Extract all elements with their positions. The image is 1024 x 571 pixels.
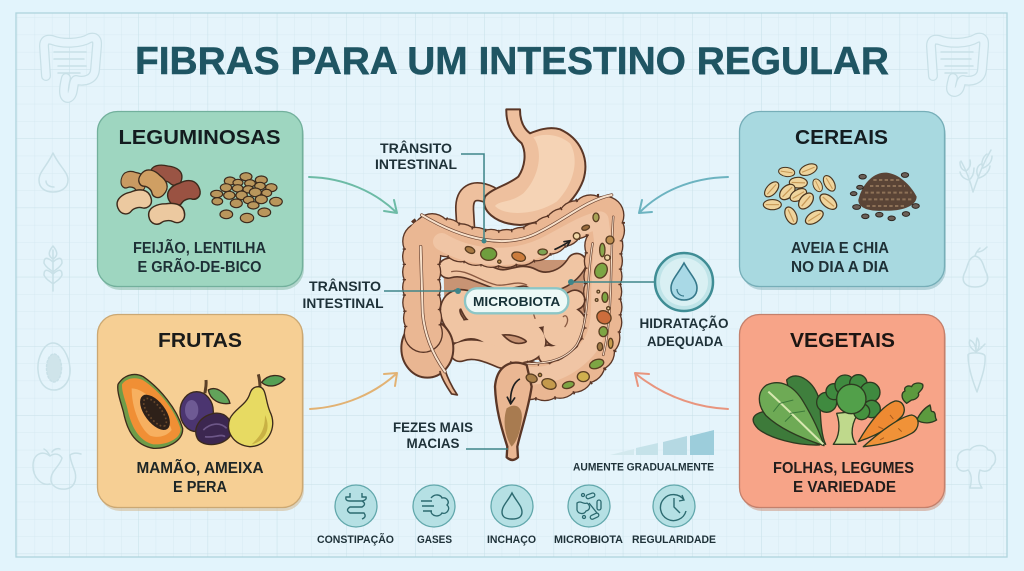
text: leguminosas description: FEIJÃO, LENTILHA [133, 239, 266, 257]
icon: inchaco [491, 485, 533, 527]
icon: faint wheat right [960, 150, 992, 192]
icon: regularidade [653, 485, 695, 527]
heading: leguminosas: LEGUMINOSAS [118, 127, 280, 149]
pill: microbiota: MICROBIOTA [473, 295, 560, 309]
pill: microbiota [465, 288, 568, 313]
panel: vegetais [740, 314, 946, 511]
label: fezes mais macias: MACIAS [406, 435, 460, 451]
arrow: vegetais to intestine [635, 373, 728, 409]
text: vegetais description: E VARIEDADE [793, 479, 896, 496]
text: frutas description: E PERA [173, 479, 227, 496]
text: leguminosas description: E GRÃO-DE-BICO [138, 258, 262, 276]
flow arrows [507, 241, 570, 404]
label: microbiota: MICROBIOTA [554, 534, 623, 546]
heading: frutas: FRUTAS [158, 330, 242, 352]
icon: faint papaya left [38, 343, 70, 390]
icon: faint papaya seeds [46, 354, 62, 382]
arrow: frutas to intestine [310, 373, 397, 409]
icon: leafy greens, broccoli and carrots [753, 375, 937, 447]
label: gases: GASES [417, 534, 452, 546]
colon [401, 195, 613, 395]
label: fezes mais macias: FEZES MAIS [393, 419, 473, 435]
icon: hydration circle [655, 253, 713, 311]
stomach [484, 109, 585, 225]
arrow: cereais to intestine [639, 177, 728, 213]
icon: faint broccoli right [957, 446, 995, 488]
duodenum [465, 192, 490, 233]
icon: faint intestine left [44, 38, 97, 98]
title: FIBRAS PARA UM INTESTINO REGULAR [135, 40, 889, 83]
panel: leguminosas [98, 112, 304, 290]
panel: frutas [98, 314, 304, 511]
label: transito intestinal left: INTESTINAL [302, 295, 384, 311]
panel: cereais [740, 112, 946, 290]
text: frutas description [136, 459, 264, 496]
icon: faint intestine right [931, 38, 984, 92]
label: aumente gradualmente: AUMENTE GRADUALMENTE [573, 462, 714, 474]
icon: faint apple and pear [33, 449, 81, 489]
label: hidratacao adequada [640, 314, 729, 349]
heading: cereais: CEREAIS [795, 127, 888, 149]
colon contents [464, 213, 614, 391]
text: frutas description: MAMÃO, AMEIXA [136, 459, 264, 477]
icon: microbiota [568, 485, 610, 527]
text: cereais description: NO DIA A DIA [791, 259, 889, 276]
icon: oats and chia [762, 162, 919, 227]
label: constipacao: CONSTIPAÇÃO [317, 533, 394, 546]
icon: papaya, plums and pear [118, 374, 285, 448]
icon: constipacao [335, 485, 377, 527]
icon: gases [413, 485, 455, 527]
leader lines [384, 154, 656, 449]
icon: beans and lentils [114, 163, 282, 225]
label: transito intestinal left: TRÂNSITO [309, 277, 381, 294]
text: cereais description: AVEIA E CHIA [791, 240, 889, 257]
background icons [33, 38, 995, 489]
digestive system illustration [401, 109, 614, 460]
text: cereais description [791, 240, 889, 276]
label: regularidade: REGULARIDADE [632, 534, 716, 546]
label: transito intestinal top [375, 139, 457, 172]
arrow: leguminosas to intestine [309, 177, 397, 213]
icon row [317, 485, 716, 546]
text: leguminosas description [133, 239, 266, 276]
label: hidratacao adequada: ADEQUADA [647, 333, 723, 349]
label: fezes mais macias [393, 419, 473, 451]
label: transito intestinal top: INTESTINAL [375, 156, 457, 172]
rectum [495, 363, 532, 460]
icon: faint pear right [963, 247, 988, 287]
heading: vegetais: VEGETAIS [790, 330, 895, 352]
label: hidratacao adequada: HIDRATAÇÃO [640, 314, 729, 331]
label: transito intestinal top: TRÂNSITO [380, 139, 452, 156]
chart: gradual increase bars [610, 430, 714, 455]
small intestine [443, 260, 584, 360]
icon: faint drop [39, 153, 68, 192]
leader dots [455, 238, 574, 294]
text: vegetais description [773, 460, 914, 496]
label: inchaco: INCHAÇO [487, 534, 536, 546]
text: vegetais description: FOLHAS, LEGUMES [773, 460, 914, 477]
icon: faint carrot right [968, 338, 985, 392]
label: transito intestinal left [302, 277, 384, 311]
icon: faint wheat left [44, 246, 62, 291]
